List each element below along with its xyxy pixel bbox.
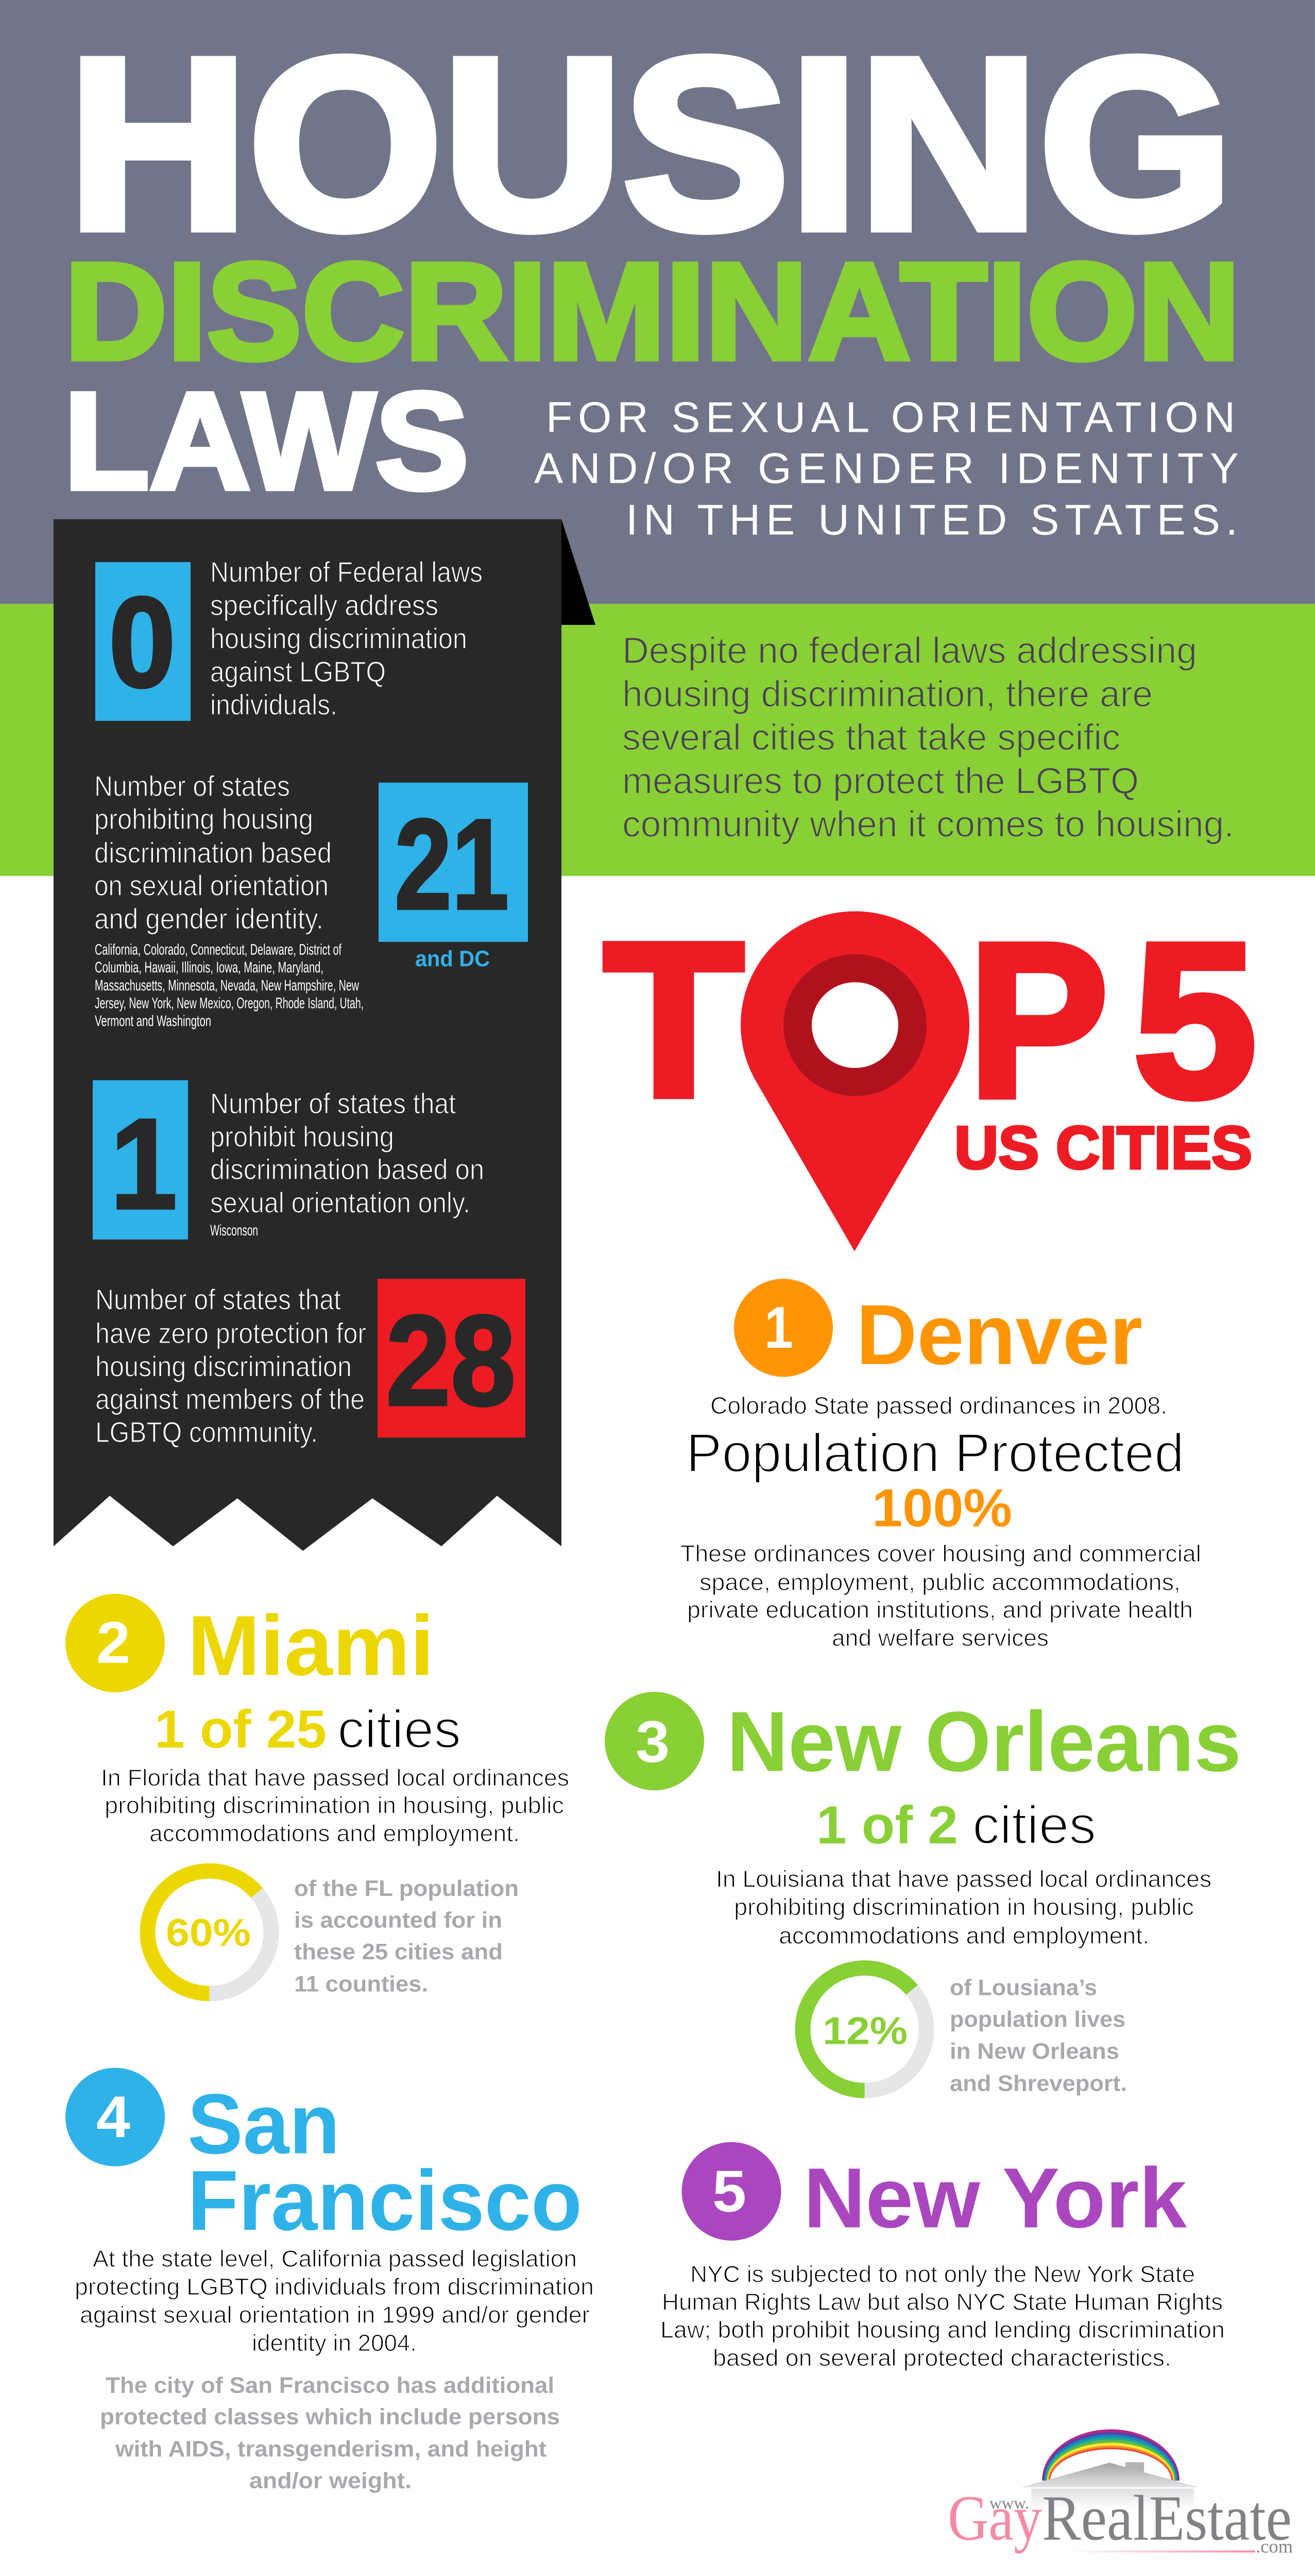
- stat: 21 states and DC: Massachusetts, Minnesota, Nevada, New Hampshire, New: [95, 977, 359, 994]
- San Francisco note: and/or weight.: [249, 2468, 412, 2494]
- donut note: is accounted for in: [294, 1908, 502, 1933]
- San Francisco note: The city of San Francisco has additional: [106, 2372, 554, 2398]
- Miami description: In Florida that have passed local ordinances: [101, 1765, 569, 1791]
- badge 2: [65, 1594, 165, 1692]
- badge 3: [605, 1692, 704, 1790]
- New Orleans description: [716, 1866, 1211, 1948]
- donut chart: 12 percent: 12%: [823, 2010, 908, 2053]
- heading: top 5 us cities: [604, 897, 1257, 1251]
- badge 4: [65, 2068, 165, 2166]
- donut note: these 25 cities and: [294, 1939, 503, 1964]
- section: 3 New Orleans: [605, 1692, 1241, 2096]
- stat: 21 states and DC: Jersey, New York, New Mexico, Oregon, Rhode Island, Utah,: [95, 995, 364, 1012]
- Denver description: [680, 1540, 1201, 1651]
- donut chart: 60 percent: 60%: [166, 1912, 251, 1955]
- donut note: and Shreveport.: [950, 2071, 1127, 2096]
- Denver description: private education institutions, and private health: [687, 1597, 1193, 1623]
- stat: 28 states: [95, 1279, 525, 1448]
- Denver description: These ordinances cover housing and commercial: [680, 1540, 1201, 1567]
- stat: 21 states and DC: [94, 770, 528, 1030]
- San Francisco note: with AIDS, transgenderism, and height: [115, 2436, 547, 2462]
- heading: top 5 us cities: 5: [1133, 897, 1257, 1143]
- section: 5 New York: [660, 2142, 1225, 2371]
- stat: zero federal laws: individuals.: [210, 689, 337, 721]
- intro paragraph: Despite no federal laws addressing: [622, 630, 1197, 671]
- heading: Miami: Miami: [187, 1599, 434, 1693]
- stat: 1 of 25 cities: cities: [337, 1699, 461, 1759]
- heading: Denver: Denver: [856, 1287, 1142, 1382]
- Miami description: accommodations and employment.: [149, 1820, 520, 1846]
- New York description: Human Rights Law but also NYC State Human Rights: [662, 2289, 1223, 2315]
- section: 2 Miami: [65, 1594, 569, 1996]
- San Francisco description: protecting LGBTQ individuals from discrimination: [75, 2274, 594, 2300]
- stat: 1 state: Number of states that: [210, 1088, 456, 1120]
- intro paragraph: housing discrimination, there are: [622, 674, 1153, 715]
- heading: top 5 us cities: US CITIES: [954, 1114, 1252, 1181]
- donut note: 11 counties.: [294, 1972, 428, 1996]
- San Francisco note: [100, 2372, 560, 2494]
- New Orleans description: accommodations and employment.: [779, 1922, 1149, 1948]
- stat: 28 states: against members of the: [95, 1383, 365, 1415]
- Miami description: [101, 1765, 569, 1846]
- stat: 21 states and DC: Columbia, Hawaii, Illinois, Iowa, Maine, Maryland,: [95, 959, 323, 976]
- icon: house: [1021, 2462, 1198, 2509]
- stat: zero federal laws: [95, 556, 483, 721]
- donut note: [950, 1975, 1127, 2096]
- Miami description: prohibiting discrimination in housing, public: [105, 1792, 564, 1819]
- donut note: of Lousiana’s: [950, 1975, 1097, 2000]
- stat: 21 states and DC: and gender identity.: [94, 903, 323, 935]
- stat: 21 states and DC: Number of states: [94, 770, 290, 802]
- stat: zero federal laws: housing discrimination: [210, 623, 467, 654]
- badge 5: 5: [712, 2159, 746, 2224]
- heading: top 5 us cities: P: [968, 897, 1108, 1143]
- section: 1 Denver: Colorado State passed ordinances in 2008.: [710, 1392, 1167, 1419]
- panel: header background: [0, 0, 1315, 604]
- stat: 28 states: LGBTQ community.: [95, 1416, 318, 1448]
- panel: green band: [0, 604, 1315, 876]
- stat: 1 state: discrimination based on: [210, 1154, 484, 1185]
- donut chart: 12 percent: [802, 1968, 926, 2091]
- title word: housing: HOUSING: [68, 7, 1233, 280]
- stat: zero federal laws: 0: [109, 571, 176, 714]
- stat: 1 state: sexual orientation only.: [210, 1187, 470, 1218]
- badge 1: [734, 1279, 833, 1377]
- logo: GayRealEstate.com: Gay: [948, 2483, 1042, 2554]
- stat: 28 states: have zero protection for: [95, 1317, 366, 1349]
- stat: 1 of 2 cities: [816, 1795, 1096, 1855]
- subtitle: AND/OR GENDER IDENTITY: [534, 444, 1239, 492]
- intro paragraph: [622, 630, 1234, 845]
- Denver description: and welfare services: [832, 1625, 1049, 1651]
- heading: top 5 us cities: T: [604, 897, 744, 1142]
- New Orleans description: In Louisiana that have passed local ordinances: [716, 1866, 1211, 1892]
- donut note: [294, 1876, 519, 1996]
- stat: 1 state: Wisconson: [210, 1222, 258, 1239]
- icon: map pin forming the letter O: [741, 911, 969, 1251]
- donut note: population lives: [950, 2007, 1125, 2032]
- stat: 21 states and DC: on sexual orientation: [94, 870, 329, 902]
- San Francisco description: [75, 2246, 594, 2356]
- heading: San Francisco: Francisco: [187, 2154, 582, 2248]
- heading: San Francisco: San: [187, 2077, 340, 2172]
- stat: 1 of 25 cities: [155, 1699, 461, 1759]
- stat: 21 states and DC: discrimination based: [94, 837, 332, 869]
- logo: GayRealEstate.com: www.: [989, 2494, 1029, 2512]
- stat: 21 states and DC: and DC: [415, 946, 490, 972]
- section: 4 San Francisco: [65, 2068, 594, 2494]
- San Francisco description: At the state level, California passed legislation: [93, 2246, 577, 2272]
- title: [64, 7, 1240, 518]
- logo: GayRealEstate.com: RealEstate: [1042, 2483, 1292, 2554]
- subtitle: FOR SEXUAL ORIENTATION: [546, 393, 1235, 441]
- panel: dark ribbon with statistics: [54, 519, 595, 1551]
- New York description: NYC is subjected to not only the New York State: [690, 2261, 1195, 2287]
- title word: laws: LAWS: [64, 364, 469, 518]
- New York description: based on several protected characteristics.: [713, 2345, 1171, 2371]
- logo: GayRealEstate.com: [948, 2429, 1293, 2556]
- New Orleans description: prohibiting discrimination in housing, public: [734, 1894, 1194, 1920]
- badge 3: 3: [636, 1709, 670, 1774]
- badge 1: 1: [764, 1295, 793, 1361]
- stat: 1 of 2 cities: 1 of 2: [816, 1795, 958, 1855]
- stat: zero federal laws: against LGBTQ: [210, 656, 386, 688]
- section: 1 Denver: Population Protected: [686, 1422, 1184, 1484]
- stat: 1 state: prohibit housing: [210, 1121, 394, 1153]
- heading: New Orleans: New Orleans: [727, 1694, 1241, 1789]
- San Francisco description: identity in 2004.: [252, 2330, 417, 2356]
- heading: New York: New York: [804, 2151, 1187, 2246]
- subtitle: [534, 393, 1239, 544]
- Denver description: space, employment, public accommodations,: [699, 1569, 1181, 1596]
- stat: 28 states: 28: [386, 1289, 516, 1433]
- donut note: of the FL population: [294, 1876, 519, 1901]
- stat: 1 state: [93, 1080, 484, 1240]
- logo: GayRealEstate.com: .com: [1256, 2536, 1293, 2556]
- title word: discrimination: DISCRIMINATION: [64, 234, 1240, 388]
- stat: 21 states and DC: prohibiting housing: [94, 803, 313, 835]
- ribbon body: [54, 519, 561, 1551]
- stat: 1 of 2 cities: cities: [972, 1795, 1096, 1855]
- stat: 28 states: Number of states that: [95, 1284, 341, 1316]
- New York description: [660, 2261, 1225, 2371]
- stat: 21 states and DC: Vermont and Washington: [95, 1013, 211, 1030]
- badge 5: [682, 2142, 781, 2241]
- stat: 1 of 25 cities: 1 of 25: [155, 1699, 327, 1759]
- stat: 1 state: 1: [110, 1092, 177, 1236]
- badge 4: 4: [96, 2084, 130, 2150]
- ribbon fold: [561, 519, 595, 625]
- stat: zero federal laws: specifically address: [210, 589, 438, 621]
- intro paragraph: several cities that take specific: [622, 717, 1120, 758]
- San Francisco note: protected classes which include persons: [100, 2404, 560, 2430]
- intro paragraph: measures to protect the LGBTQ: [622, 760, 1139, 802]
- donut note: in New Orleans: [950, 2039, 1119, 2064]
- stat: 21 states and DC: California, Colorado, Connecticut, Delaware, District of: [95, 941, 341, 958]
- stat: 21 states and DC: 21: [395, 793, 509, 937]
- stat: 28 states: housing discrimination: [95, 1351, 352, 1382]
- badge 2: 2: [96, 1610, 130, 1675]
- icon: rainbow: [1042, 2429, 1180, 2481]
- subtitle: IN THE UNITED STATES.: [626, 496, 1238, 544]
- New York description: Law; both prohibit housing and lending discrimination: [660, 2316, 1225, 2343]
- stat: zero federal laws: Number of Federal laws: [210, 556, 483, 588]
- intro paragraph: community when it comes to housing.: [622, 804, 1234, 845]
- donut chart: 60 percent: [147, 1871, 271, 1993]
- heading: San Francisco: [187, 2077, 582, 2248]
- section: 1 Denver: 100%: [872, 1478, 1012, 1538]
- section: 1 Denver: [680, 1279, 1201, 1651]
- San Francisco description: against sexual orientation in 1999 and/or gender: [80, 2302, 590, 2328]
